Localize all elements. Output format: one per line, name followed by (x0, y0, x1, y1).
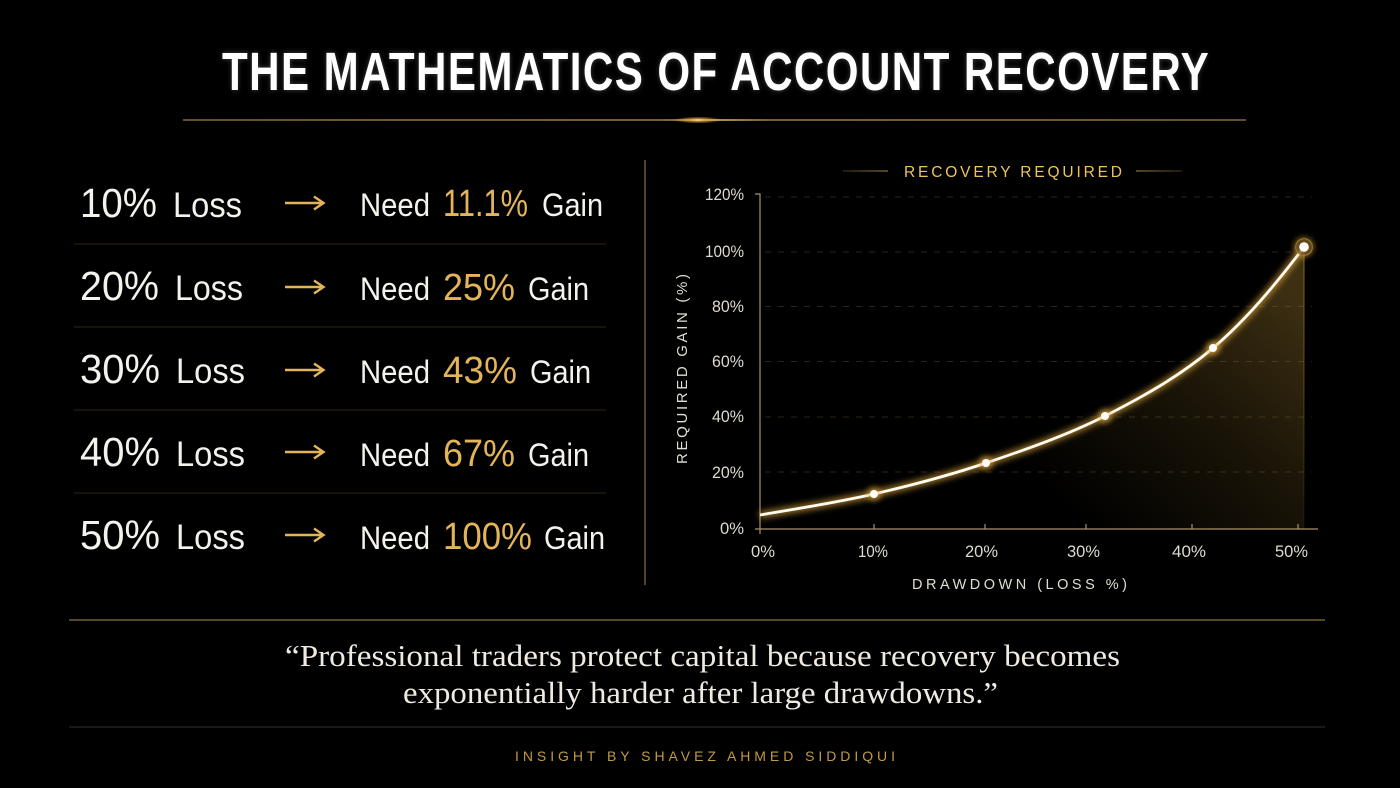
area under curve (760, 247, 1304, 529)
y axis labels: 120% (705, 186, 744, 204)
panel: recovery chart (674, 164, 1318, 593)
x axis labels: 30% (1067, 543, 1100, 561)
footer credit: INSIGHT BY SHAVEZ AHMED SIDDIQUI (515, 748, 895, 764)
row: 40% loss (80, 429, 589, 475)
y axis labels: 100% (705, 243, 744, 261)
quote: “Professional traders protect capital because recovery becomes (285, 638, 1120, 673)
row: 50% loss: Loss (176, 518, 245, 557)
quote (285, 638, 1120, 710)
row: 30% loss: 30% (80, 346, 160, 392)
row: 10% loss: Gain (542, 187, 603, 223)
x axis labels: 20% (965, 543, 998, 561)
row: 10% loss: 11.1% (443, 183, 528, 225)
row: 20% loss: 20% (80, 263, 159, 309)
x axis labels: 10% (858, 543, 888, 561)
row: 40% loss: 40% (80, 429, 160, 475)
row: 20% loss: Gain (528, 271, 589, 307)
curve glow (760, 247, 1304, 515)
title: THE MATHEMATICS OF ACCOUNT RECOVERY (222, 42, 1209, 102)
data points (867, 237, 1314, 501)
panel: loss to gain table (74, 180, 606, 558)
chart heading: RECOVERY REQUIRED (904, 164, 1122, 181)
x axis labels (751, 543, 1308, 561)
row: 50% loss: 50% (80, 512, 160, 558)
y axis labels: 20% (712, 464, 744, 482)
axes (755, 194, 1318, 534)
x axis labels: 40% (1172, 543, 1206, 561)
row: 10% loss: Loss (173, 186, 242, 225)
row: 50% loss: 100% (443, 516, 532, 558)
x axis labels: 50% (1275, 543, 1308, 561)
row: 40% loss: Loss (176, 435, 245, 474)
row: 20% loss: Loss (175, 269, 243, 308)
y axis labels: 0% (720, 520, 744, 538)
row: 20% loss: Need (360, 271, 430, 307)
row: 50% loss (80, 512, 605, 558)
title: THE MATHEMATICS OF ACCOUNT RECOVERY (222, 42, 1209, 102)
recovery curve (760, 247, 1304, 515)
row: 40% loss: Gain (528, 437, 589, 473)
x axis title: DRAWDOWN (LOSS %) (912, 577, 1127, 593)
quote: exponentially harder after large drawdowns.” (403, 675, 998, 710)
row: 30% loss: 43% (443, 350, 517, 392)
row: 30% loss: Loss (176, 352, 245, 391)
row: 10% loss: 10% (80, 180, 157, 226)
row: 30% loss: Gain (530, 354, 591, 390)
row: 10% loss: Need (360, 187, 430, 223)
row: 30% loss: Need (360, 354, 430, 390)
row: 30% loss (80, 346, 591, 392)
y axis labels: 40% (712, 408, 744, 426)
y axis labels: 60% (712, 353, 744, 371)
row: 10% loss (80, 180, 603, 226)
row: 20% loss (80, 263, 589, 309)
row: 50% loss: Gain (544, 520, 605, 556)
y axis title: REQUIRED GAIN (%) (674, 274, 691, 464)
row: 40% loss: 67% (443, 433, 515, 475)
x axis labels: 0% (751, 543, 775, 561)
row: 40% loss: Need (360, 437, 430, 473)
row: 50% loss: Need (360, 520, 430, 556)
y axis labels: 80% (712, 298, 744, 316)
title underline with flare (183, 116, 1246, 124)
row: 20% loss: 25% (443, 267, 515, 309)
y axis labels (705, 186, 744, 538)
